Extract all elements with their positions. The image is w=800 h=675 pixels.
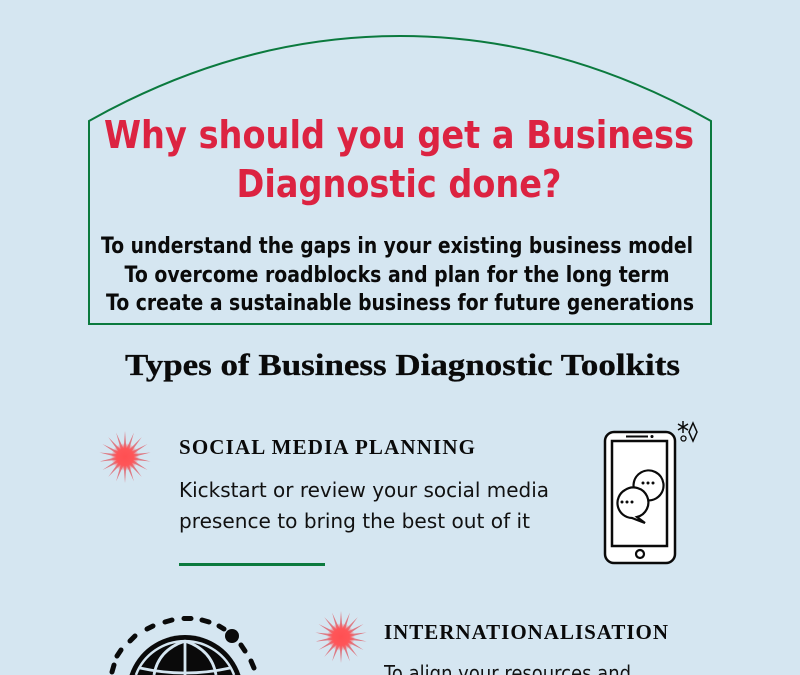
icon: globe with orbit <box>112 618 254 675</box>
title: Diagnostic done? <box>236 162 562 206</box>
heading: types of toolkits: Types of Business Diagnostic Toolkits <box>125 347 680 382</box>
title: Why should you get a Business <box>104 113 694 157</box>
reasons text <box>101 234 694 316</box>
panel: internationalisation <box>112 611 668 675</box>
reasons text: To create a sustainable business for future generations <box>106 291 694 316</box>
description: Kickstart or review your social media <box>179 478 549 502</box>
heading: internationalisation: INTERNATIONALISATION <box>384 620 668 644</box>
icon: starburst <box>99 431 151 483</box>
panel: social media planning <box>99 421 697 566</box>
title <box>104 113 694 206</box>
description: presence to bring the best out of it <box>179 509 530 533</box>
divider <box>179 563 325 566</box>
heading: social media planning: SOCIAL MEDIA PLANNING <box>179 435 475 459</box>
icon: smartphone with chat bubbles <box>605 421 697 563</box>
description <box>179 478 549 533</box>
arched panel outline <box>89 36 711 324</box>
reasons text: To overcome roadblocks and plan for the long term <box>124 263 670 288</box>
reasons text: To understand the gaps in your existing business model <box>101 234 693 259</box>
icon: starburst <box>315 611 367 663</box>
panel: why get a diagnostic <box>89 36 711 324</box>
